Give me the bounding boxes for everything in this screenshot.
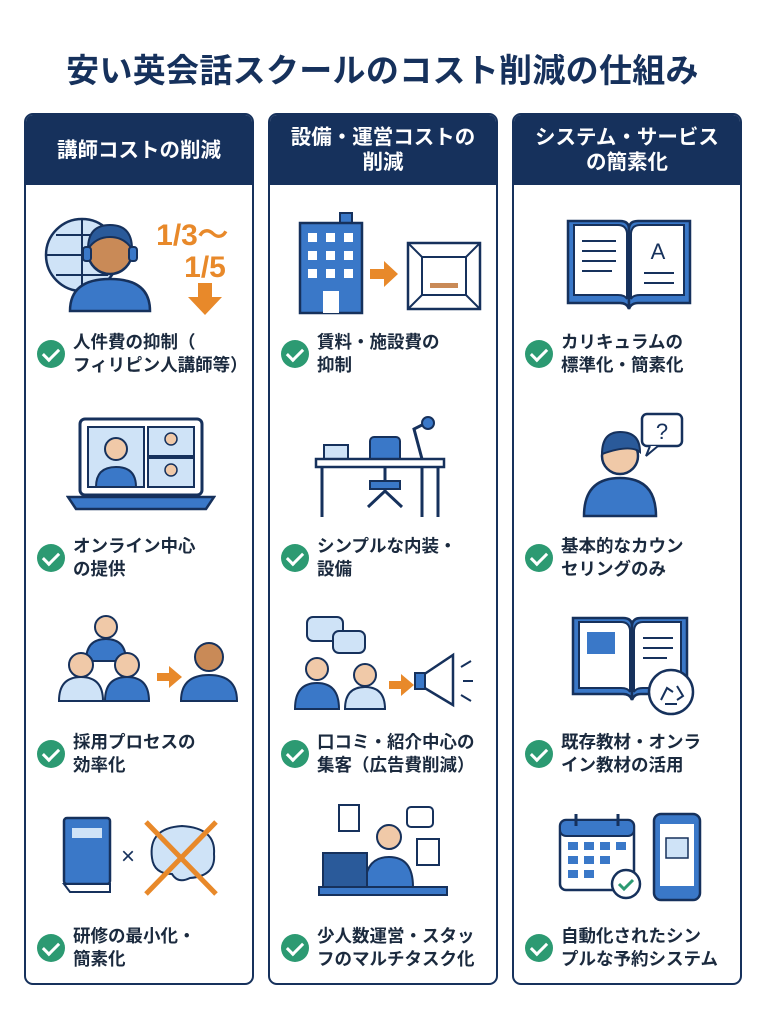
text: simple interior: 設備 [317, 559, 352, 579]
heading: instructor cost [26, 115, 252, 185]
heading: systems [514, 115, 740, 185]
heading: systems: システム・サービス [535, 126, 719, 149]
text: booking system [525, 926, 718, 969]
text: curriculum: カリキュラムの [561, 332, 683, 352]
text: online [37, 536, 196, 579]
icon: building to small room [298, 212, 482, 314]
panel: system simplification [512, 113, 742, 985]
icon: teacher with headset and globe: 1/5 [184, 251, 226, 284]
text: few staff [281, 926, 474, 969]
icon: simple desk [314, 416, 446, 517]
icon: teacher with headset and globe [44, 218, 228, 315]
icon: staff at computer [318, 804, 448, 896]
text: booking system: 自動化されたシン [561, 926, 701, 946]
text: labor cost: フィリピン人講師等） [73, 355, 248, 375]
text: word of mouth: 集客（広告費削減） [317, 755, 474, 775]
heading: facility cost: 削減 [362, 151, 404, 174]
icon: calendar and phone [558, 812, 702, 902]
heading: systems: の簡素化 [586, 151, 668, 174]
text: counseling [525, 536, 684, 579]
text: materials [525, 732, 701, 775]
text: curriculum: 標準化・簡素化 [561, 355, 684, 375]
text: counseling: セリングのみ [561, 559, 666, 579]
icon: person with question: ? [656, 419, 668, 444]
text: online: の提供 [73, 559, 126, 579]
text: recruitment: 採用プロセスの [73, 732, 196, 752]
text: training [37, 926, 196, 969]
icon: person with question [582, 412, 684, 518]
heading: facility cost: 設備・運営コストの [291, 126, 475, 149]
icon: recruitment people [58, 615, 238, 702]
icon: book with recycle [572, 616, 694, 716]
text: materials: 既存教材・オンラ [561, 732, 701, 752]
text: recruitment: 効率化 [73, 755, 126, 775]
text: materials: イン教材の活用 [561, 755, 684, 775]
text: rent: 賃料・施設費の [317, 332, 440, 352]
text: online: オンライン中心 [73, 536, 196, 556]
heading: facility cost [270, 115, 496, 185]
text: rent: 抑制 [317, 355, 352, 375]
text: labor cost [37, 332, 248, 375]
panel: instructor cost [24, 113, 254, 985]
text: few staff: 少人数運営・スタッ [317, 926, 474, 946]
icon: open book with A [566, 220, 692, 310]
title: 安い英会話スクールのコスト削減の仕組み [66, 52, 699, 89]
icon: open book with A: A [651, 239, 666, 264]
icon: teacher with headset and globe: 1/3〜 [156, 219, 228, 252]
text: simple interior [281, 536, 456, 579]
text: counseling: 基本的なカウン [561, 536, 684, 556]
text: recruitment [37, 732, 196, 775]
text: word of mouth [281, 732, 474, 775]
panel: facility cost [268, 113, 498, 985]
text: curriculum [525, 332, 684, 375]
icon: word of mouth [294, 616, 473, 710]
icon: book x brain [62, 816, 218, 896]
text: training: 簡素化 [73, 949, 126, 969]
text: few staff: フのマルチタスク化 [317, 949, 474, 969]
icon: book x brain: × [121, 843, 135, 870]
text: training: 研修の最小化・ [73, 926, 196, 946]
text: booking system: プルな予約システム [561, 949, 718, 969]
heading: instructor cost: 講師コストの削減 [57, 138, 221, 162]
text: word of mouth: 口コミ・紹介中心の [317, 732, 474, 752]
text: simple interior: シンプルな内装・ [317, 536, 456, 556]
text: labor cost: 人件費の抑制（ [73, 332, 196, 352]
text: rent [281, 332, 440, 375]
icon: online lesson laptop [66, 418, 216, 510]
